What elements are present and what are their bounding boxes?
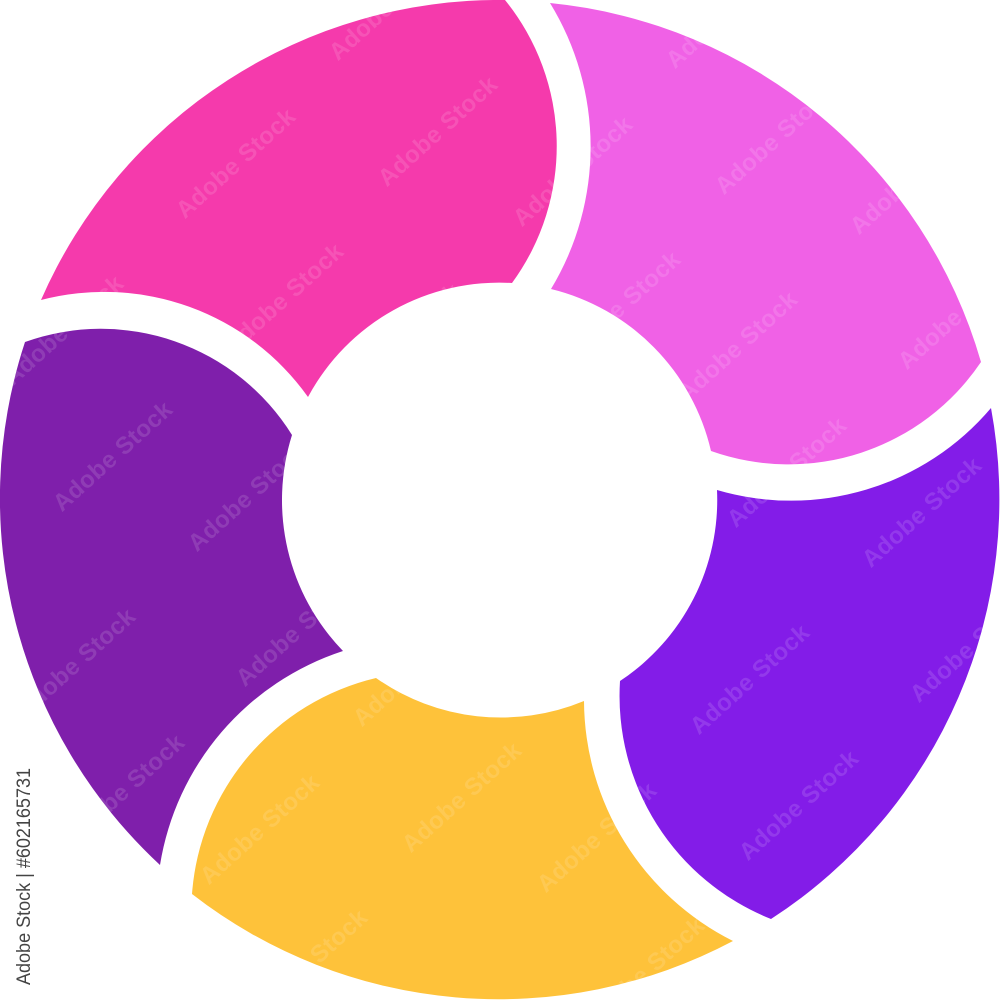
watermark pattern: Adobe Stock [195,769,325,890]
watermark pattern: Adobe Stock [869,785,999,906]
watermark pattern: Adobe Stock [568,579,698,700]
segment: purple [0,329,343,865]
segment: violet [620,408,999,919]
watermark pattern: Adobe Stock [171,103,301,224]
watermark pattern: Adobe Stock [722,412,852,533]
watermark pattern: Adobe Stock [845,119,975,240]
watermark pattern: Adobe Stock [0,270,129,391]
segment: light magenta [550,3,981,464]
watermark pattern: Adobe Stock [183,436,313,557]
watermark pattern: Adobe Stock [385,404,515,525]
watermark pattern: Adobe Stock [520,444,650,565]
watermark pattern: Adobe Stock [336,278,466,399]
stock id label: Adobe Stock | #602165731 [14,768,35,985]
watermark pattern: Adobe Stock [48,396,178,517]
watermark pattern: Adobe Stock [710,79,840,200]
watermark pattern: Adobe Stock [373,71,503,192]
watermark pattern: Adobe Stock [673,286,803,407]
segment: hot pink [41,0,557,397]
watermark pattern: Adobe Stock [685,619,815,740]
watermark pattern: Adobe Stock [11,603,141,724]
watermark pattern: Adobe Stock [508,111,638,232]
watermark pattern: Adobe Stock [556,246,686,367]
watermark pattern: Adobe Stock [231,571,361,692]
watermark pattern: Adobe Stock [36,63,166,184]
watermark pattern: Adobe Stock [734,745,864,866]
watermark pattern: Adobe Stock [532,777,662,898]
watermark pattern: Adobe Stock [397,737,527,858]
watermark pattern: Adobe Stock [348,611,478,732]
segment: yellow [192,678,733,999]
watermark pattern: Adobe Stock [60,729,190,850]
watermark pattern: Adobe Stock [857,452,987,573]
watermark pattern: Adobe Stock [219,238,349,359]
